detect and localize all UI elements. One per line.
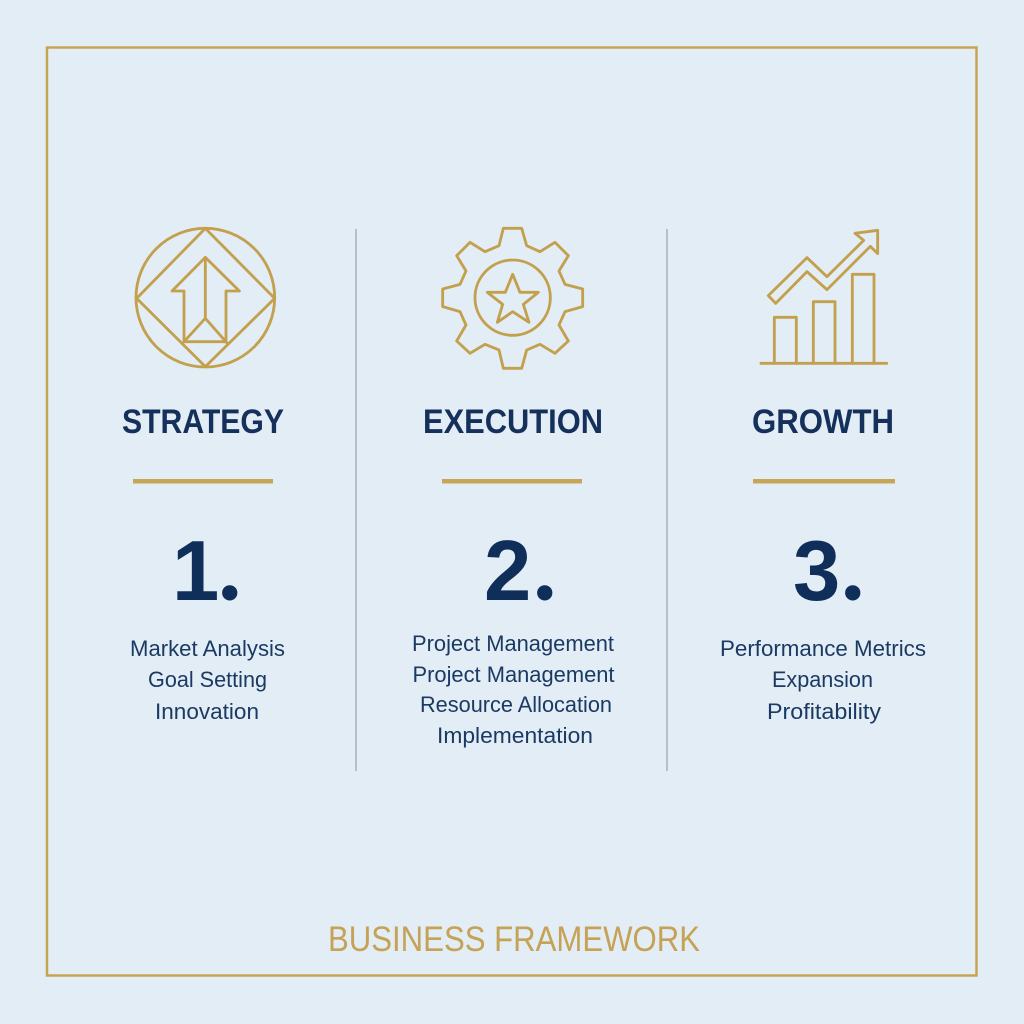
gold rule: growth [753,479,895,484]
text block: execution items: Project Management [412,631,614,656]
text block: strategy items: Goal Setting [148,667,267,692]
number 1: . [218,516,242,620]
text block: strategy items [130,636,285,724]
text block: growth items [720,636,926,724]
text block: execution items: Project Management [412,662,614,687]
text block: strategy items: Innovation [155,699,259,724]
number 3: . [841,516,864,620]
divider right [666,229,668,771]
icon: diamond arrow in circle [136,228,275,367]
text block: execution items: Resource Allocation [420,692,612,717]
text block: execution items [412,631,614,748]
number 1: 1 [172,524,219,619]
panel: execution [412,228,614,748]
divider left [355,229,357,771]
number 2: 2 [484,524,531,619]
heading: strategy: STRATEGY [122,403,284,441]
text block: execution items: Implementation [437,723,593,748]
panel: growth [720,230,926,724]
number 3: 3 [793,524,840,619]
gold rule: strategy [133,479,273,484]
icon: gear with star [443,228,583,368]
text block: growth items: Profitability [767,699,881,724]
icon: bar chart with rising arrow [761,230,887,363]
text block: growth items: Expansion [772,667,873,692]
panel: strategy [122,228,285,724]
heading: execution: EXECUTION [423,403,603,441]
number 2: . [533,516,556,620]
heading: growth: GROWTH [752,403,894,441]
text block: strategy items: Market Analysis [130,636,285,661]
text block: growth items: Performance Metrics [720,636,926,661]
gold rule: execution [442,479,582,484]
footer title: BUSINESS FRAMEWORK [328,920,700,959]
